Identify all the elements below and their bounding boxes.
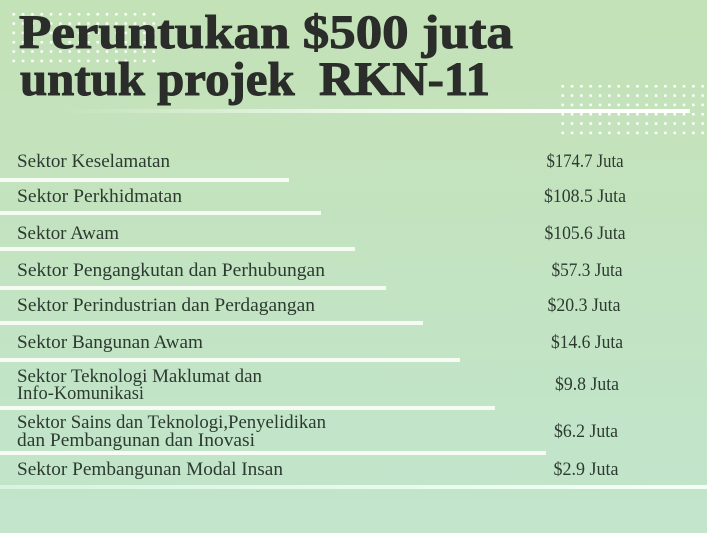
- row: Sektor Bangunan Awam: [0, 332, 624, 362]
- row: Sektor Sains dan Teknologi: Sektor Sains dan Teknologi,Penyelidikan: [17, 412, 326, 433]
- title: Peruntukan $500 juta: [19, 6, 513, 59]
- row: Sektor Perindustrian dan Perdagangan: [0, 295, 621, 325]
- row: Sektor Teknologi Maklumat dan Info-Komunikasi: Info-Komunikasi: [17, 383, 144, 404]
- dot pattern: top left: [12, 13, 156, 65]
- row: Sektor Sains dan Teknologi: dan Pembangunan dan Inovasi: [17, 430, 255, 451]
- row: Sektor Perindustrian dan Perdagangan: $20.3 Juta: [548, 295, 621, 316]
- row: Sektor Pembangunan Modal Insan: Sektor Pembangunan Modal Insan: [17, 459, 284, 480]
- row: Sektor Perindustrian dan Perdagangan: Sektor Perindustrian dan Perdagangan: [17, 295, 316, 316]
- row: Sektor Perkhidmatan: $108.5 Juta: [544, 186, 627, 207]
- title rule: [60, 109, 690, 113]
- row: Sektor Perkhidmatan: Sektor Perkhidmatan: [17, 186, 183, 207]
- dot pattern: right: [562, 85, 707, 137]
- row: Sektor Pengangkutan dan Perhubungan: [0, 260, 623, 290]
- row: Sektor Perkhidmatan: [0, 186, 627, 215]
- row: Sektor Teknologi Maklumat dan Info-Komunikasi: Sektor Teknologi Maklumat dan: [17, 366, 262, 387]
- row: Sektor Keselamatan: Sektor Keselamatan: [17, 151, 170, 172]
- row: Sektor Sains dan Teknologi: $6.2 Juta: [554, 421, 619, 442]
- row: Sektor Pengangkutan dan Perhubungan: Sektor Pengangkutan dan Perhubungan: [17, 260, 326, 281]
- title: untuk projek RKN-11: [20, 53, 490, 106]
- title: [19, 6, 513, 106]
- row: Sektor Keselamatan: $174.7 Juta: [546, 151, 624, 172]
- row: Sektor Sains dan Teknologi: [0, 412, 619, 455]
- row: Sektor Awam: $105.6 Juta: [544, 223, 626, 244]
- row: Sektor Bangunan Awam: $14.6 Juta: [551, 332, 624, 353]
- row: Sektor Pembangunan Modal Insan: $2.9 Juta: [554, 459, 619, 480]
- row: Sektor Pengangkutan dan Perhubungan: $57.3 Juta: [552, 260, 623, 281]
- row: Sektor Awam: [0, 223, 626, 251]
- row: Sektor Teknologi Maklumat dan Info-Komunikasi: $9.8 Juta: [555, 374, 620, 395]
- row: Sektor Pembangunan Modal Insan: [0, 459, 707, 489]
- row: Sektor Bangunan Awam: Sektor Bangunan Awam: [17, 332, 203, 353]
- row: Sektor Teknologi Maklumat dan Info-Komunikasi: [0, 366, 620, 410]
- row: Sektor Keselamatan: [0, 151, 624, 182]
- row: Sektor Awam: Sektor Awam: [17, 223, 119, 244]
